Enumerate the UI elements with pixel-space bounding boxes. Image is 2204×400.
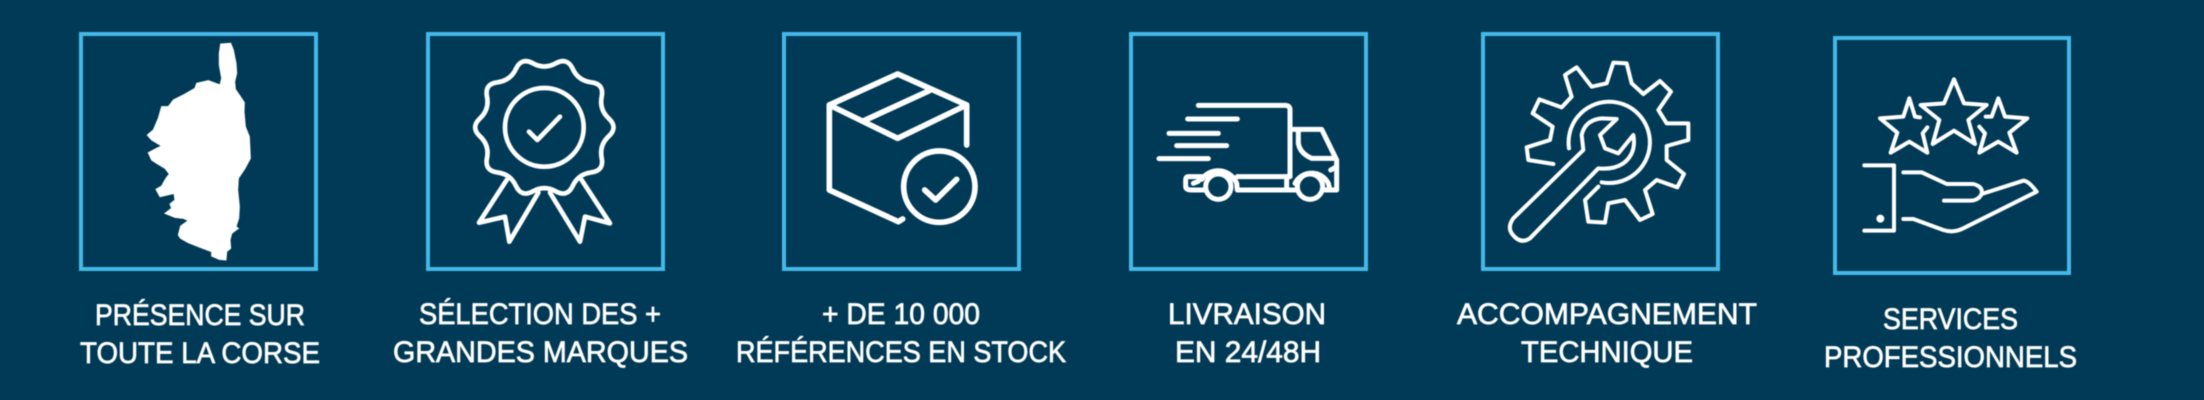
label: services professionnels: SERVICES	[1883, 303, 2018, 336]
panel: livraison en 24/48h	[1131, 34, 1366, 369]
icon: hand holding three stars	[1864, 79, 2037, 231]
icon: box with check mark	[829, 74, 975, 222]
label: présence sur toute la Corse: PRÉSENCE SUR	[95, 299, 305, 332]
label: accompagnement technique: ACCOMPAGNEMENT	[1457, 298, 1757, 331]
label: sélection des grandes marques	[393, 298, 688, 369]
panel: services professionnels	[1824, 38, 2077, 374]
icon frame: tools	[1483, 34, 1718, 269]
label: sélection des grandes marques: GRANDES MARQUES	[393, 336, 688, 369]
label: accompagnement technique	[1457, 298, 1757, 369]
label: plus de 10 000 références: RÉFÉRENCES EN STOCK	[736, 336, 1066, 369]
icon: map of Corsica	[147, 43, 250, 260]
label: présence sur toute la Corse	[80, 299, 320, 370]
label: sélection des grandes marques: SÉLECTION DES +	[419, 298, 661, 331]
icon frame: box	[784, 34, 1019, 269]
label: plus de 10 000 références: + DE 10 000	[822, 298, 980, 331]
icon: gear and wrench	[1510, 63, 1688, 241]
label: accompagnement technique: TECHNIQUE	[1521, 336, 1693, 369]
label: livraison en 24/48h: LIVRAISON	[1168, 298, 1326, 331]
icon frame: badge	[428, 34, 663, 269]
icon: award rosette	[475, 61, 614, 242]
icon: delivery truck	[1159, 105, 1337, 199]
label: services professionnels: PROFESSIONNELS	[1824, 341, 2077, 374]
panel: sélection des grandes marques	[393, 34, 688, 369]
icon frame: truck	[1131, 34, 1366, 269]
label: livraison en 24/48h	[1168, 298, 1326, 369]
label: services professionnels	[1824, 303, 2077, 374]
icon frame: service	[1835, 38, 2069, 273]
label: plus de 10 000 références	[736, 298, 1066, 369]
label: livraison en 24/48h: EN 24/48H	[1175, 336, 1321, 369]
panel: plus de 10 000 références	[736, 34, 1066, 369]
panel: présence sur toute la Corse	[80, 34, 320, 370]
icon frame: Corse	[81, 34, 316, 269]
panel: accompagnement technique	[1457, 34, 1757, 369]
label: présence sur toute la Corse: TOUTE LA CORSE	[80, 337, 320, 370]
